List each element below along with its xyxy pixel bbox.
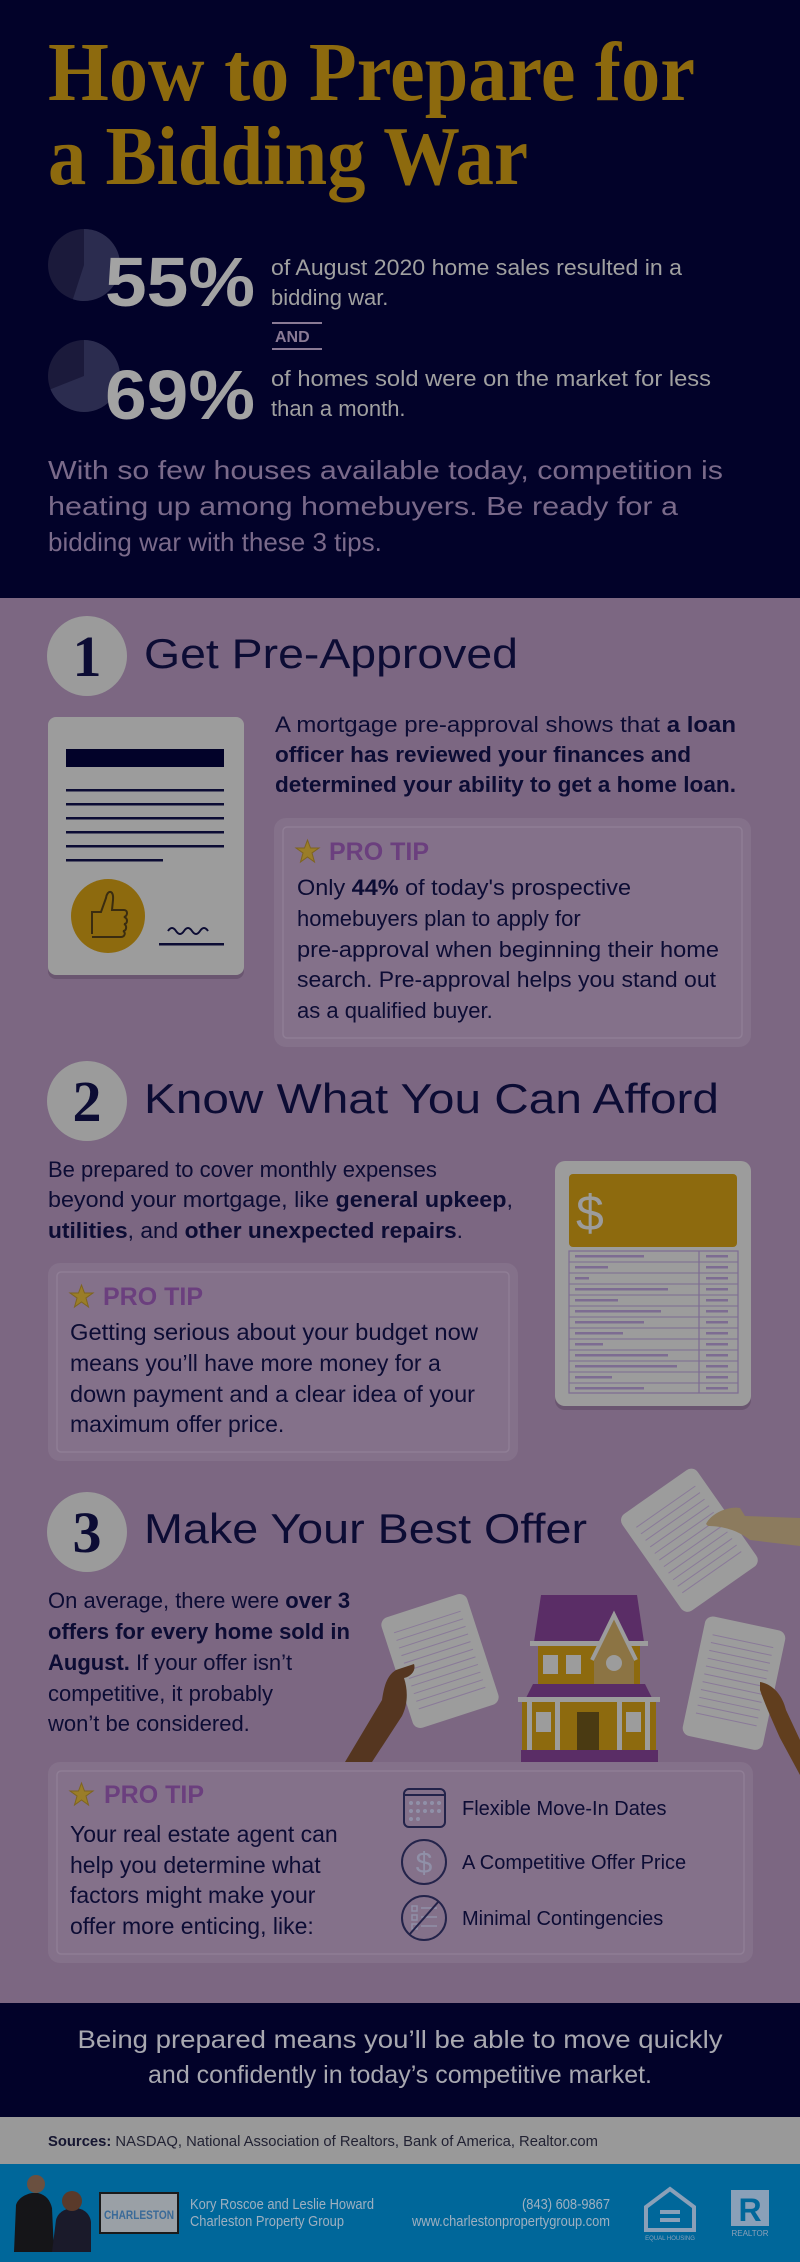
icon: dollar circle: [402, 1840, 446, 1884]
pro tip 3: Minimal Contingencies: [462, 1908, 663, 1930]
text block 3: On average, there were over 3: [48, 1588, 350, 1613]
pro tip 2: Getting serious about your budget now: [70, 1319, 478, 1345]
stat: 55%: of August 2020 home sales resulted in a: [271, 255, 683, 280]
pro tip 1: as a qualified buyer.: [297, 998, 493, 1023]
icon: calendar: [404, 1789, 445, 1827]
panel: tips background: [0, 598, 800, 2003]
number badge 1: [47, 616, 127, 696]
pro tip 3: offer more enticing, like:: [70, 1913, 314, 1939]
icon: no contingencies: [402, 1896, 446, 1940]
pro tip 2: maximum offer price.: [70, 1411, 284, 1437]
agent names: Charleston Property Group: [190, 2213, 344, 2230]
icon: star: [70, 1285, 93, 1307]
icon: equal housing: [645, 2189, 695, 2242]
pro tip 2: down payment and a clear idea of your: [70, 1381, 475, 1407]
number badge 1: 1: [72, 624, 102, 689]
pro tip 3: Your real estate agent can: [70, 1821, 338, 1847]
pro tip 3: Flexible Move-In Dates: [462, 1798, 667, 1820]
AND divider: [272, 322, 322, 350]
text block 3: offers for every home sold in: [48, 1619, 350, 1644]
stat: 55%: 55%: [105, 243, 255, 321]
title: How to Prepare for: [48, 26, 695, 119]
intro text: [48, 455, 723, 557]
panel: sources: Sources: NASDAQ, National Association of Realtors, Bank of America, Realtor.com: [48, 2133, 598, 2150]
heading 1: Get Pre-Approved: [144, 630, 518, 677]
text block 3: [47, 1588, 350, 1736]
pro tip 1: Only 44% of today's prospective: [297, 875, 631, 900]
right paper and arm: [681, 1615, 787, 1751]
AND divider: AND: [275, 329, 310, 346]
pro tip 3: [48, 1762, 753, 1963]
agent names: [190, 2196, 374, 2230]
icon: budget sheet: $: [576, 1185, 604, 1241]
icon: dollar circle: $: [416, 1847, 433, 1880]
agent names: Kory Roscoe and Leslie Howard: [190, 2196, 374, 2213]
contact: (843) 608-9867: [522, 2196, 610, 2213]
icon: star: [296, 840, 319, 862]
pro tip 3: factors might make your: [70, 1882, 316, 1908]
panel: header: [0, 0, 800, 598]
icon: realtor: [731, 2190, 769, 2238]
panel: closing statement: [0, 2003, 800, 2117]
title: a Bidding War: [48, 110, 528, 203]
pro tip 3: A Competitive Offer Price: [462, 1852, 686, 1874]
title: [48, 26, 695, 203]
contact: [411, 2196, 610, 2230]
agent photo: [14, 2175, 91, 2252]
number badge 3: 3: [72, 1500, 102, 1565]
pro tip 1: pre-approval when beginning their home: [297, 937, 719, 962]
pro tip 3: help you determine what: [70, 1852, 321, 1878]
text block 3: won’t be considered.: [47, 1711, 250, 1736]
pro tip 1: homebuyers plan to apply for: [297, 906, 581, 931]
intro text: With so few houses available today, competition is: [48, 455, 723, 485]
panel: footer: [0, 2164, 800, 2262]
pro tip 1: search. Pre-approval helps you stand out: [297, 967, 716, 992]
section 1: get pre-approved: [47, 616, 751, 1047]
text block 3: August. If your offer isn’t: [48, 1650, 292, 1675]
text block 1: officer has reviewed your finances and: [275, 742, 691, 767]
pro tip 2: PRO TIP: [103, 1283, 203, 1311]
icon: equal housing: EQUAL HOUSING: [645, 2236, 695, 2242]
stat: 69%: [48, 340, 711, 434]
icon: star: [70, 1783, 93, 1805]
stat: 55%: bidding war.: [271, 285, 388, 310]
pro tip 3: PRO TIP: [104, 1781, 204, 1809]
intro text: bidding war with these 3 tips.: [48, 527, 382, 557]
pro tip 2: [48, 1263, 518, 1461]
stat: 69%: than a month.: [271, 396, 406, 421]
number badge 2: [47, 1061, 127, 1141]
logo: Charleston Property Group: CHARLESTON: [104, 2208, 174, 2222]
stat: 55%: [48, 229, 683, 321]
heading 2: Know What You Can Afford: [144, 1075, 719, 1122]
stat: 69%: 69%: [105, 356, 255, 434]
illustration: house and offers: [345, 1466, 800, 1775]
text block 2: Be prepared to cover monthly expenses: [48, 1157, 437, 1182]
icon: realtor: REALTOR: [731, 2229, 769, 2238]
section 3: make your best offer: [47, 1466, 800, 1963]
text block 1: A mortgage pre-approval shows that a loan: [275, 712, 736, 737]
icon: approval document: [48, 717, 244, 979]
section 2: know what you can afford: [47, 1061, 751, 1461]
number badge 2: 2: [72, 1069, 102, 1134]
icon: realtor: R: [738, 2192, 762, 2228]
stat: 69%: of homes sold were on the market for less: [271, 366, 711, 391]
number badge 3: [47, 1492, 127, 1572]
text block 1: determined your ability to get a home loan.: [275, 772, 736, 797]
contact: www.charlestonpropertygroup.com: [411, 2213, 610, 2230]
panel: closing statement: and confidently in today’s competitive market.: [148, 2061, 652, 2089]
text block 1: [275, 712, 736, 797]
panel: closing statement: Being prepared means you’ll be able to move quickly: [78, 2026, 723, 2054]
pro tip 1: [274, 818, 751, 1047]
top right paper and hand: [618, 1466, 761, 1615]
icon: budget sheet: [555, 1161, 751, 1410]
panel: sources: [0, 2117, 800, 2164]
left paper and arm: [379, 1592, 501, 1730]
text block 2: [48, 1157, 513, 1243]
pro tip 2: means you’ll have more money for a: [70, 1350, 441, 1376]
text block 2: utilities, and other unexpected repairs .: [48, 1218, 463, 1243]
text block 3: competitive, it probably: [48, 1681, 273, 1706]
heading 3: Make Your Best Offer: [144, 1505, 587, 1552]
text block 2: beyond your mortgage, like general upkeep ,: [48, 1187, 513, 1212]
logo: Charleston Property Group: [99, 2192, 179, 2234]
house: [534, 1595, 644, 1642]
pro tip 1: PRO TIP: [329, 838, 429, 866]
intro text: heating up among homebuyers. Be ready for a: [48, 491, 679, 521]
